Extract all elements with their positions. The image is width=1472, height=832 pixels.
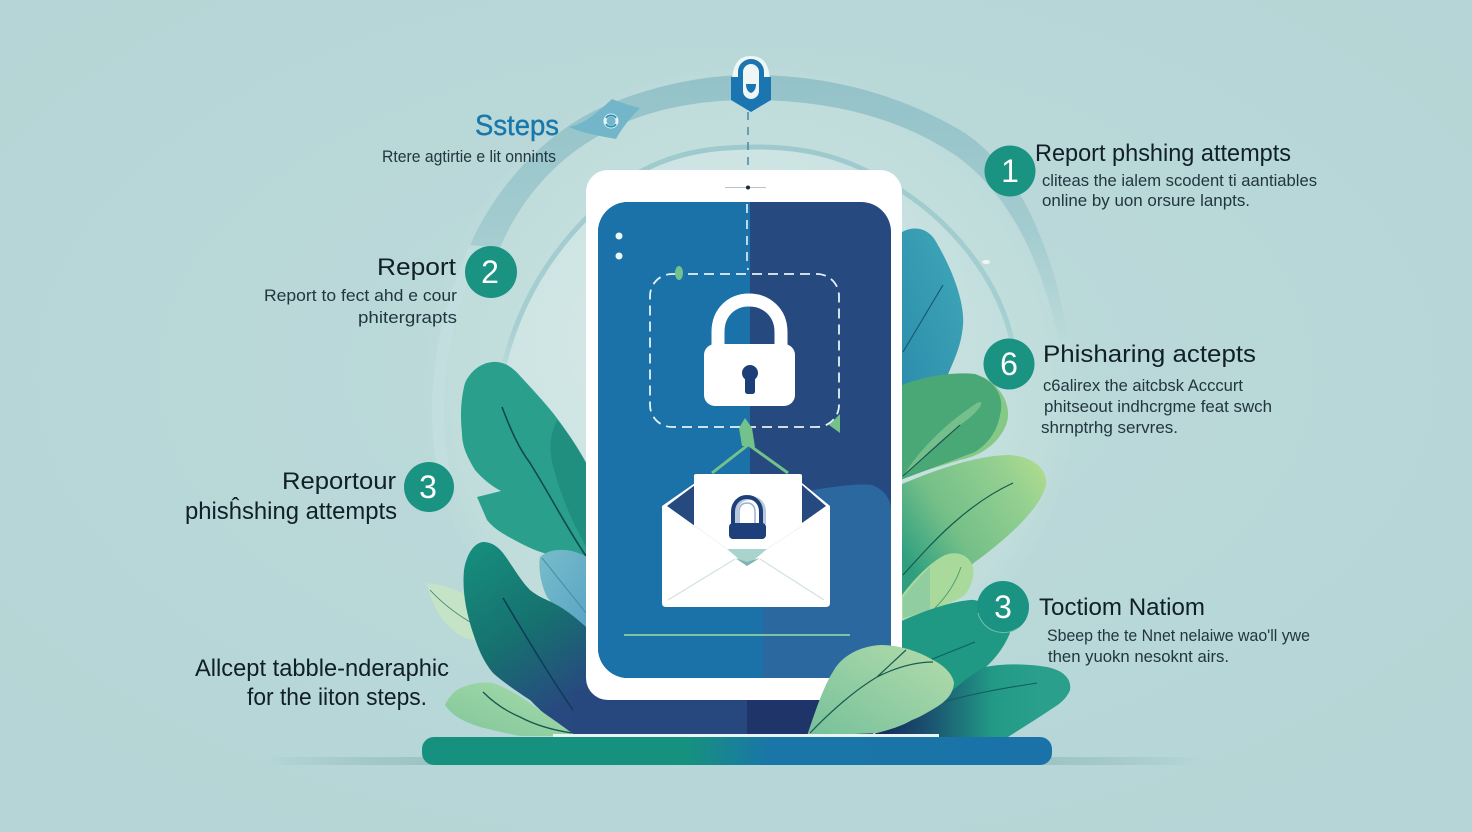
leaf: dark to teal lower right	[873, 664, 1070, 737]
heading: Report	[377, 254, 456, 281]
description: Sbeep the te Nnet nelaiwe wao'll ywe	[1047, 626, 1310, 645]
leaf: light blue	[539, 550, 592, 634]
badge 3 right	[977, 581, 1029, 633]
description: c6alirex the aitcbsk Acccurt	[1043, 376, 1243, 395]
leaf: front light green	[807, 645, 954, 736]
envelope flap triangles	[667, 485, 826, 526]
envelope fold lines	[668, 526, 824, 600]
step: toction nation 3: then yuokn nesoknt airs.	[1048, 647, 1229, 666]
leaf: green middle right	[895, 373, 1008, 482]
envelope with lock	[662, 474, 830, 607]
leaf: dark teal lower left	[463, 542, 592, 736]
leaves behind left of phone	[427, 362, 592, 736]
heading: Toctiom Natiom	[1039, 594, 1205, 621]
badge 3 right: 3	[994, 589, 1012, 625]
leaves behind right of phone	[873, 228, 1070, 737]
top shield lock icon	[731, 56, 771, 112]
phone stand base	[573, 690, 873, 737]
badge 1	[984, 146, 1036, 196]
steps heading block	[382, 99, 640, 166]
leaf: large teal upper left	[461, 362, 592, 558]
step: toction nation 3	[977, 581, 1310, 666]
step: report your phishing attempts 3	[185, 462, 454, 525]
phone speaker	[725, 186, 766, 190]
dashed connector	[747, 112, 748, 270]
badge 2	[465, 246, 517, 298]
heading: Report phshing attempts	[1035, 140, 1291, 167]
dashed frame	[650, 274, 839, 427]
step: report phishing attempts 1: online by uon orsure lanpts.	[1042, 191, 1250, 210]
step: phishing attempts 6: phitseout indhcrgme feat swch	[1044, 397, 1272, 416]
envelope letter	[694, 474, 802, 564]
padlock	[704, 300, 795, 406]
step: phishing attempts 6	[984, 338, 1272, 437]
description: Rtere agtirtie e lit onnints	[382, 147, 556, 166]
heading	[185, 468, 397, 525]
heading: Ssteps: Ssteps	[475, 110, 559, 142]
infographic canvas	[186, 56, 1316, 765]
badge 3 left: 3	[419, 469, 437, 505]
heading: Phisharing actepts	[1043, 341, 1256, 368]
badge 1: 1	[1001, 153, 1019, 189]
heading: phisĥshing attempts	[185, 497, 397, 525]
leaf: teal right	[895, 600, 1010, 700]
screen green rule	[624, 634, 850, 636]
background rings	[425, 65, 1075, 715]
phone screen	[598, 202, 891, 678]
heading: Reportour	[282, 468, 396, 495]
ground shadow	[265, 757, 1200, 765]
step: report 2: phitergrapts	[358, 308, 457, 327]
screen dots	[616, 232, 622, 260]
leaf: light green bottom left	[445, 682, 576, 736]
green frame markers	[675, 266, 840, 433]
phone body	[586, 170, 902, 700]
badge 6: 6	[1000, 346, 1018, 382]
step: report 2	[264, 246, 517, 327]
description: cliteas the ialem scodent ti aantiables	[1042, 171, 1317, 190]
badge 2: 2	[481, 254, 499, 290]
base bar	[422, 734, 1052, 765]
leaf: blue teal upper right	[895, 228, 963, 400]
bottom left note	[195, 655, 449, 711]
small lock icon	[729, 497, 766, 539]
leaf: pale green small right	[895, 553, 973, 622]
green connector	[712, 418, 788, 473]
phone	[586, 112, 902, 700]
description: Report to fect ahd e cour	[264, 286, 457, 305]
badge 3 left	[404, 462, 454, 512]
bottom left note: Allcept tabble-nderaphic	[195, 655, 449, 682]
envelope body	[662, 507, 830, 607]
leaf: large green right	[895, 455, 1046, 615]
badge 6	[984, 338, 1034, 390]
leaf: pale small left	[427, 583, 478, 640]
step: phishing attempts 6: shrnptrhg servres.	[1041, 418, 1178, 437]
bottom left note: for the iiton steps.	[247, 684, 427, 711]
step: report phishing attempts 1	[984, 140, 1317, 210]
kite icon	[569, 99, 640, 139]
envelope back	[662, 483, 830, 540]
